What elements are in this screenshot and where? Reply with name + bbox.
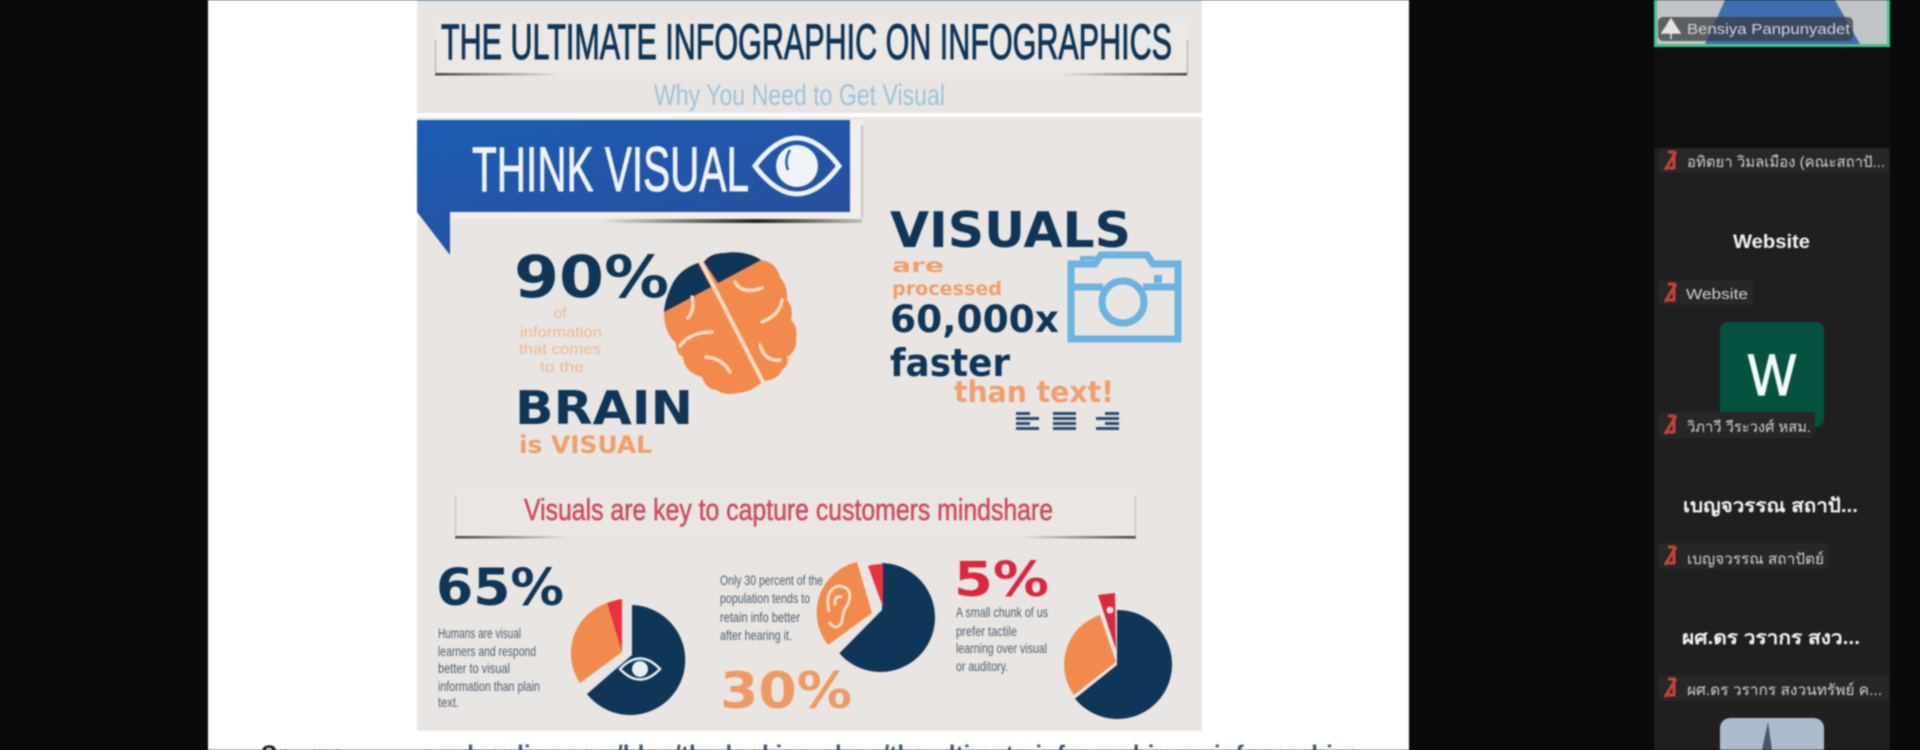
stat caption: that comes [519, 341, 601, 358]
avatar: W tile [1720, 322, 1824, 427]
participant tag: row 5 [1658, 675, 1889, 701]
icon: eye [755, 138, 839, 194]
heading: brain: BRAIN [515, 381, 693, 435]
sidebar: participants [1654, 0, 1890, 750]
description [956, 604, 1048, 674]
stat number 90%: 90% [514, 243, 669, 311]
text: than text: than text! [954, 375, 1114, 409]
participant: center name 2: ผศ.ดร วรากร สงว... [1682, 628, 1860, 649]
participant tag: row 5: ผศ.ดร วรากร สงวนทรัพย์ ค... [1687, 682, 1882, 699]
description: Humans are visual [438, 625, 521, 641]
stat: 65 percent [436, 559, 685, 715]
participant: website [1658, 232, 1810, 305]
participant tag: row 4 [1658, 543, 1828, 569]
stat caption: of [554, 305, 567, 322]
pie chart 5 [1064, 593, 1172, 719]
stat caption: to the [540, 359, 584, 376]
participant tag: row 2 [1658, 148, 1889, 173]
avatar: W tile: W [1748, 343, 1796, 408]
icon: brain [664, 252, 796, 394]
stat caption [519, 305, 602, 376]
tag [1658, 280, 1753, 305]
participant tag: row 3: วิภาวี วีระวงศ์ หสม. [1686, 419, 1811, 436]
participant: website: Website [1733, 232, 1810, 253]
icon: text alignment lines [1016, 412, 1119, 430]
description: better to visual [438, 660, 510, 676]
stat number 60,000x: 60,000x [890, 298, 1059, 341]
name tag: Bensiya Panpunyadet [1687, 21, 1851, 38]
description: prefer tactile [956, 623, 1017, 639]
subheading text: Visuals are key to capture customers mindshare [524, 492, 1053, 527]
description [720, 572, 823, 643]
stat: 30 percent [720, 562, 935, 720]
title: THE ULTIMATE INFOGRAPHIC ON INFOGRAPHICS [441, 14, 1172, 70]
icon: eye on pie [620, 658, 660, 680]
subtitle: Why You Need to Get Visual [654, 79, 945, 112]
description: text. [438, 694, 459, 710]
pie chart 65 [571, 599, 685, 715]
participant tag: row 3 [1658, 412, 1815, 438]
description: population tends to [720, 590, 810, 606]
stat: 90 percent brain [514, 243, 693, 459]
description: after hearing it. [720, 627, 792, 643]
banner heading: THINK VISUAL [472, 135, 749, 205]
description: A small chunk of us [956, 604, 1048, 620]
description: information than plain [438, 678, 540, 694]
icon: ear [828, 586, 850, 627]
number: 65% [436, 559, 564, 618]
description: learning over visual [956, 640, 1047, 656]
number: 5% [954, 552, 1049, 608]
heading: visuals: VISUALS [890, 202, 1131, 259]
label: is visual: is VISUAL [519, 431, 652, 459]
participant: Bensiya video tile [1654, 0, 1890, 47]
text: are processed [892, 255, 1002, 300]
description: Only 30 percent of the [720, 572, 823, 588]
infographic main panel [417, 117, 1202, 731]
name tag [1658, 17, 1853, 41]
number: 30% [720, 662, 852, 720]
icon: camera [1071, 255, 1178, 339]
stat: 5 percent [954, 552, 1172, 719]
tag: Website [1686, 286, 1748, 303]
text: are processed: processed [892, 278, 1002, 300]
stat caption: information [520, 324, 602, 341]
description [438, 625, 540, 710]
banner: think visual [417, 120, 863, 255]
slide: white page [208, 0, 1409, 750]
avatar: photo thumbnail [1720, 718, 1824, 750]
description: learners and respond [438, 643, 536, 659]
participant: center name 1: เบญจวรรณ สถาปั... [1683, 496, 1858, 517]
pie chart 30 [817, 562, 935, 672]
description: retain info better [720, 609, 800, 625]
stat: visuals 60000x faster [890, 202, 1131, 409]
text: are processed: are [892, 255, 944, 277]
text: faster: faster [890, 341, 1010, 385]
infographic header panel [417, 0, 1202, 113]
description: or auditory. [956, 658, 1008, 674]
participant tag: row 4: เบญจวรรณ สถาปัตย์ [1687, 551, 1824, 568]
participant tag: row 2: อทิตยา วิมลเมือง (คณะสถาปั... [1687, 154, 1885, 171]
subheading ribbon [455, 490, 1136, 538]
